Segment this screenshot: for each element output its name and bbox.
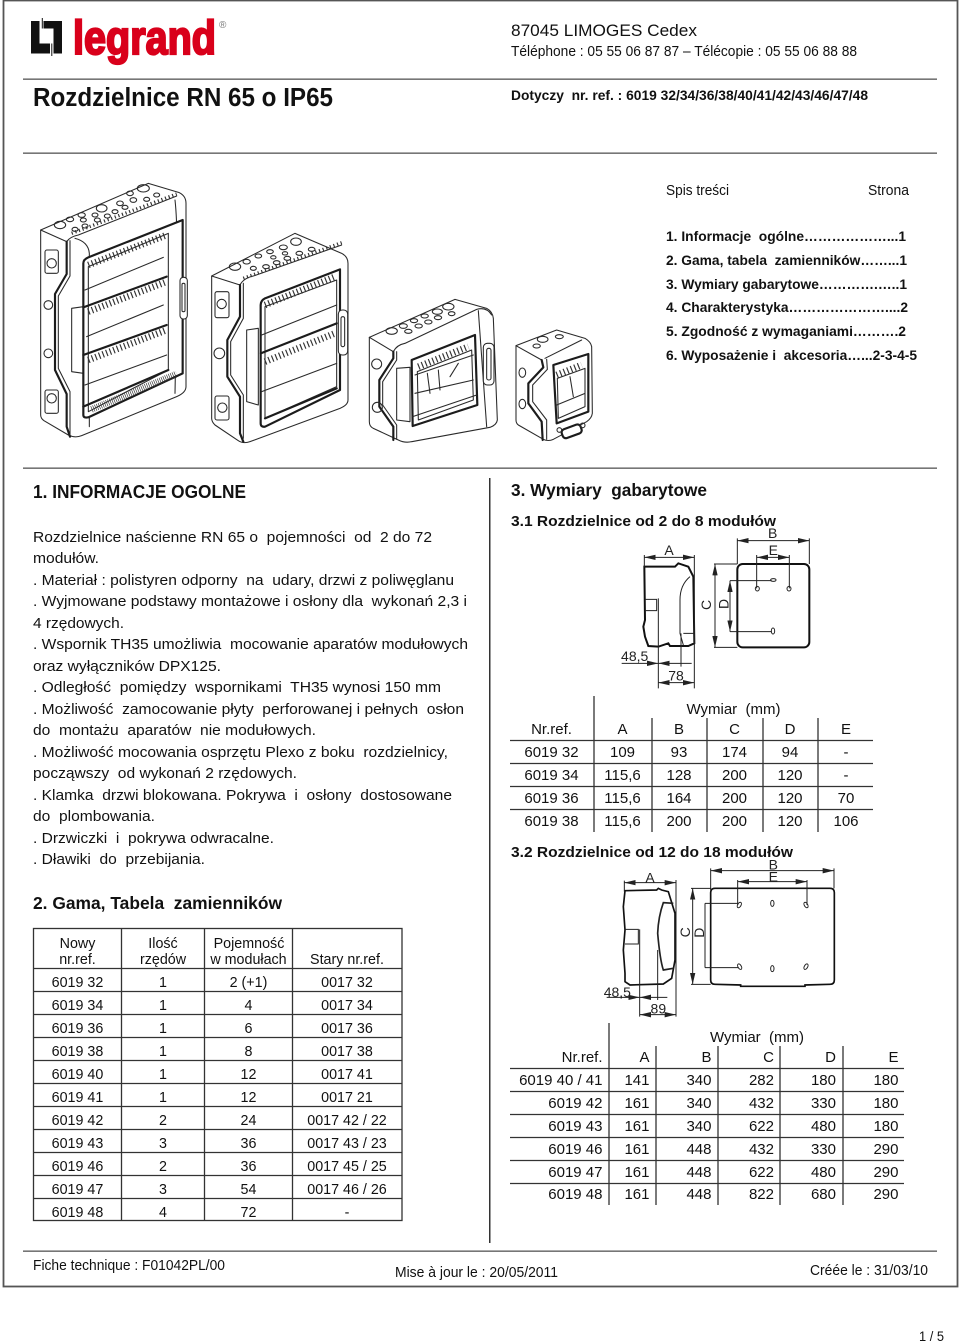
table rows: - [844,767,848,784]
table rows: 0017 36 [321,1021,373,1037]
table rows: 0017 46 / 26 [307,1182,387,1198]
section 1 text: 4 rzędowych. [33,616,124,632]
header address [511,21,857,60]
table rows: 2 (+1) [230,975,267,991]
table rows: 6019 34 [524,767,579,784]
table header: E [888,1049,898,1066]
table rows: 0017 32 [321,975,373,991]
dimension drawing: 12 to 18 modules: 48,5 [604,984,631,1000]
table rows: 200 [722,813,747,830]
table rows: 6019 47 [548,1164,602,1181]
table rows: 282 [749,1072,774,1089]
product illustration: large enclosure, 72 modules [41,183,187,437]
title: Rozdzielnice RN 65 o IP65 [33,84,333,112]
table rows: 54 [241,1182,256,1198]
table rows: 448 [686,1141,712,1158]
table rows: 161 [624,1186,650,1203]
table header: Ilość [148,936,178,952]
table grid [510,696,873,832]
table grid [33,928,402,1221]
table rows: 340 [686,1095,712,1112]
table rows: 93 [671,744,687,761]
dimension drawing: 2 to 8 modules: 78 [668,667,684,683]
table rows: 1 [159,1021,167,1037]
table rows: 480 [811,1164,836,1181]
logo icon [31,18,62,56]
table: dimensions 12 to 18 modules [510,1023,904,1205]
table rows: 70 [838,790,854,807]
table rows: 0017 34 [321,998,373,1014]
dimension drawing: 12 to 18 modules: A [645,870,655,886]
table rows: 200 [722,767,747,784]
section 1 text: . Drzwiczki i pokrywa odwracalne. [33,831,274,847]
table rows: - [844,744,848,761]
section 1 text: oraz wyłączników DPX125. [33,659,221,675]
table header: C [729,721,740,738]
table rows: 141 [624,1072,650,1089]
table header: D [825,1049,836,1066]
table header: Pojemność [214,936,284,952]
table header: Nr.ref. [531,721,572,738]
table rows: 180 [873,1118,898,1135]
table rows: 6019 42 [52,1113,103,1129]
logo wordmark: legrand [73,11,216,64]
section 1 text [33,530,468,868]
table rows: 6019 48 [548,1186,602,1203]
table rows: 94 [782,744,798,761]
table rows: 0017 42 / 22 [307,1113,387,1129]
table rows: 2 [159,1159,167,1175]
footer [33,1258,928,1281]
table rows: 115,6 [604,790,641,807]
table rows [52,975,387,1221]
dimension drawing: 2 to 8 modules: D [716,599,732,609]
table rows: 8 [245,1044,253,1060]
table rows: 164 [666,790,692,807]
section 1 text: . Wyjmowane podstawy montażowe i osłony dla wykonań 2,3 i [33,594,467,610]
table rows: 120 [777,790,803,807]
dimension drawing: 12 to 18 modules: 89 [651,1001,666,1017]
table rows: 290 [873,1186,898,1203]
table rows: 330 [811,1141,836,1158]
dimension drawing: 2 to 8 modules: C [698,600,714,610]
table header: Wymiar (mm) [710,1029,804,1046]
toc entries: 1. Informacje ogólne………………...1 [666,228,906,244]
toc entries: 3. Wymiary gabarytowe………….…..1 [666,276,907,292]
table rows: 6019 46 [548,1141,602,1158]
logo: legrand [31,11,227,64]
table rows: 4 [159,1205,167,1221]
table rows: 180 [873,1095,898,1112]
table rows: 6019 38 [524,813,579,830]
table rows: 6019 34 [52,998,103,1014]
table header [562,1029,898,1066]
subsection 3.2 heading: 3.2 Rozdzielnice od 12 do 18 modułów [511,844,793,861]
table header: B [674,721,684,738]
subsection 3.1 heading: 3.1 Rozdzielnice od 2 do 8 modułów [511,513,776,530]
section 1 heading: 1. INFORMACJE OGOLNE [33,482,246,502]
table header [59,936,384,968]
table header: Stary nr.ref. [310,952,384,968]
dimension drawing: 12 to 18 modules [604,856,834,1017]
table header: E [841,721,851,738]
city: 87045 LIMOGES Cedex [511,21,698,40]
update date: Mise à jour le : 20/05/2011 [395,1265,558,1281]
table rows: 340 [686,1118,712,1135]
table rows: 36 [241,1159,256,1175]
table rows: 120 [777,813,803,830]
registered mark: ® [219,20,227,31]
table rows: 115,6 [604,767,641,784]
table rows: 72 [241,1205,256,1221]
section 1 text: do montażu aparatów nie modułowych. [33,723,316,739]
creation date: Créée le : 31/03/10 [810,1263,928,1279]
table rows: 161 [624,1118,650,1135]
section 1 text: Rozdzielnice naścienne RN 65 o pojemności od 2 do 72 [33,530,432,546]
table header: A [639,1049,650,1066]
table header: A [617,721,628,738]
table: range and replacements [33,928,402,1221]
section 1 text: do plombowania. [33,809,155,825]
table rows: 4 [245,998,253,1014]
section 2 heading: 2. Gama, Tabela zamienników [33,893,282,913]
table rows: 6019 36 [524,790,579,807]
product illustration: enclosure, 12 modules [369,299,497,442]
table rows: 128 [666,767,692,784]
table rows: 180 [811,1072,836,1089]
section 3 heading: 3. Wymiary gabarytowe [511,480,707,500]
table rows: 1 [159,1044,167,1060]
section 1 text: . Materiał : polistyren odporny na udary, drzwi z poliwęglanu [33,573,454,589]
reference line: Dotyczy nr. ref. : 6019 32/34/36/38/40/41/42/43/46/47/48 [511,88,868,103]
section 1 text: począwszy od wykonań 2 rzędowych. [33,766,297,782]
table header [531,701,851,738]
table rows: 120 [777,767,803,784]
phone line: Téléphone : 05 55 06 87 87 – Télécopie : 05 55 06 88 88 [511,44,857,60]
table rows: 290 [873,1164,898,1181]
toc entries: 5. Zgodność z wymaganiami……….2 [666,323,906,339]
table rows: 432 [749,1095,774,1112]
dimension drawing: 2 to 8 modules: A [664,542,674,558]
product illustration: small enclosure, 4 modules [516,330,592,440]
header rule [23,78,937,80]
dimension drawing: 12 to 18 modules: E [769,868,778,884]
dimension drawing: 12 to 18 modules: D [691,928,707,938]
table rows: 0017 38 [321,1044,373,1060]
table rows: 2 [159,1113,167,1129]
section 1 text: . Dławiki do przebijania. [33,852,205,868]
table rows: 1 [159,1067,167,1083]
table header: rzędów [140,952,187,968]
table grid [510,1023,904,1205]
table rows: 1 [159,975,167,991]
table rows: 200 [722,790,747,807]
toc entries: 4. Charakterystyka…………………....2 [666,299,908,315]
table rows: 6019 40 [52,1067,103,1083]
table rows: 12 [241,1067,256,1083]
table header: D [785,721,796,738]
table rows: 6019 42 [548,1095,602,1112]
table rows: 448 [686,1186,712,1203]
table rows: 0017 21 [321,1090,373,1106]
table rows: 0017 43 / 23 [307,1136,387,1152]
dimension drawing: 12 to 18 modules: B [769,856,778,872]
table rows: 680 [811,1186,836,1203]
table rows: 432 [749,1141,774,1158]
section 1 text: . Wspornik TH35 umożliwia mocowanie aparatów modułowych [33,637,468,653]
table rows: 0017 45 / 25 [307,1159,387,1175]
section 1 text: . Odległość pomiędzy wspornikami TH35 wynosi 150 mm [33,680,441,696]
table rows: 1 [159,998,167,1014]
table rows: 24 [241,1113,256,1129]
table header: Nowy [60,936,96,952]
table rows: 822 [749,1186,774,1203]
table rows: 6019 40 / 41 [519,1072,602,1089]
table rows [519,1072,898,1203]
table rows: 622 [749,1118,774,1135]
table rows: 106 [833,813,859,830]
product illustration: enclosure, 36 modules [212,233,348,443]
dimension drawing: 2 to 8 modules: 48,5 [621,648,648,664]
toc entries: 2. Gama, tabela zamienników……...1 [666,252,907,268]
section 1 text: . Klamka drzwi blokowana. Pokrywa i osłony dostosowane [33,788,452,804]
table header: Nr.ref. [562,1049,602,1066]
table rows: 480 [811,1118,836,1135]
table rows: 6019 43 [548,1118,602,1135]
table rows: 6019 48 [52,1205,103,1221]
table rows: 0017 41 [321,1067,373,1083]
table rows: 3 [159,1182,167,1198]
table header: Wymiar (mm) [686,701,781,718]
table rows: 174 [722,744,747,761]
toc heading: Spis treści [666,183,729,199]
toc page column heading: Strona [868,183,909,199]
table header: B [701,1049,712,1066]
table rows: 622 [749,1164,774,1181]
table of contents [666,183,917,363]
table rows: 6019 41 [52,1090,103,1106]
table rows: 340 [686,1072,712,1089]
table rows: 6019 32 [524,744,579,761]
table rows: 180 [873,1072,898,1089]
table rows: 6019 38 [52,1044,103,1060]
table rows: 115,6 [604,813,641,830]
table rows: 161 [624,1095,650,1112]
table rows: 36 [241,1136,256,1152]
table rows: 6019 32 [52,975,103,991]
table rows [524,744,859,830]
table rows: 448 [686,1164,712,1181]
table rows: 6019 43 [52,1136,103,1152]
table rows: 6019 47 [52,1182,103,1198]
table rows: 109 [610,744,635,761]
table rows: 161 [624,1164,650,1181]
section 1 text: . Możliwość mocowania osprzętu Plexo z boku rozdzielnicy, [33,745,448,761]
table rows: 161 [624,1141,650,1158]
section 1 text: modułów. [33,551,99,567]
dimension drawing: 12 to 18 modules: C [677,927,693,937]
toc entries [666,228,917,363]
table rows: 1 [159,1090,167,1106]
table rows: 6019 46 [52,1159,103,1175]
table rows: 6019 36 [52,1021,103,1037]
table header: C [763,1049,774,1066]
table: dimensions 2 to 8 modules [510,696,873,832]
table rows: 200 [666,813,692,830]
table rows: 12 [241,1090,256,1106]
datasheet number: Fiche technique : F01042PL/00 [33,1258,225,1274]
dimension drawing: 2 to 8 modules: E [769,542,778,558]
table header: nr.ref. [59,952,96,968]
toc entries: 6. Wyposażenie i akcesoria…...2-3-4-5 [666,347,917,363]
dimension drawing: 2 to 8 modules: B [768,525,777,541]
table rows: 6 [245,1021,253,1037]
section 1 text: . Możliwość zamocowanie płyty perforowanej i pełnych osłon [33,702,464,718]
table rows: 330 [811,1095,836,1112]
table rows: 290 [873,1141,898,1158]
table rows: 3 [159,1136,167,1152]
dimension drawing: 2 to 8 modules [621,525,809,688]
table rows: - [345,1205,350,1221]
table header: w modułach [209,952,287,968]
